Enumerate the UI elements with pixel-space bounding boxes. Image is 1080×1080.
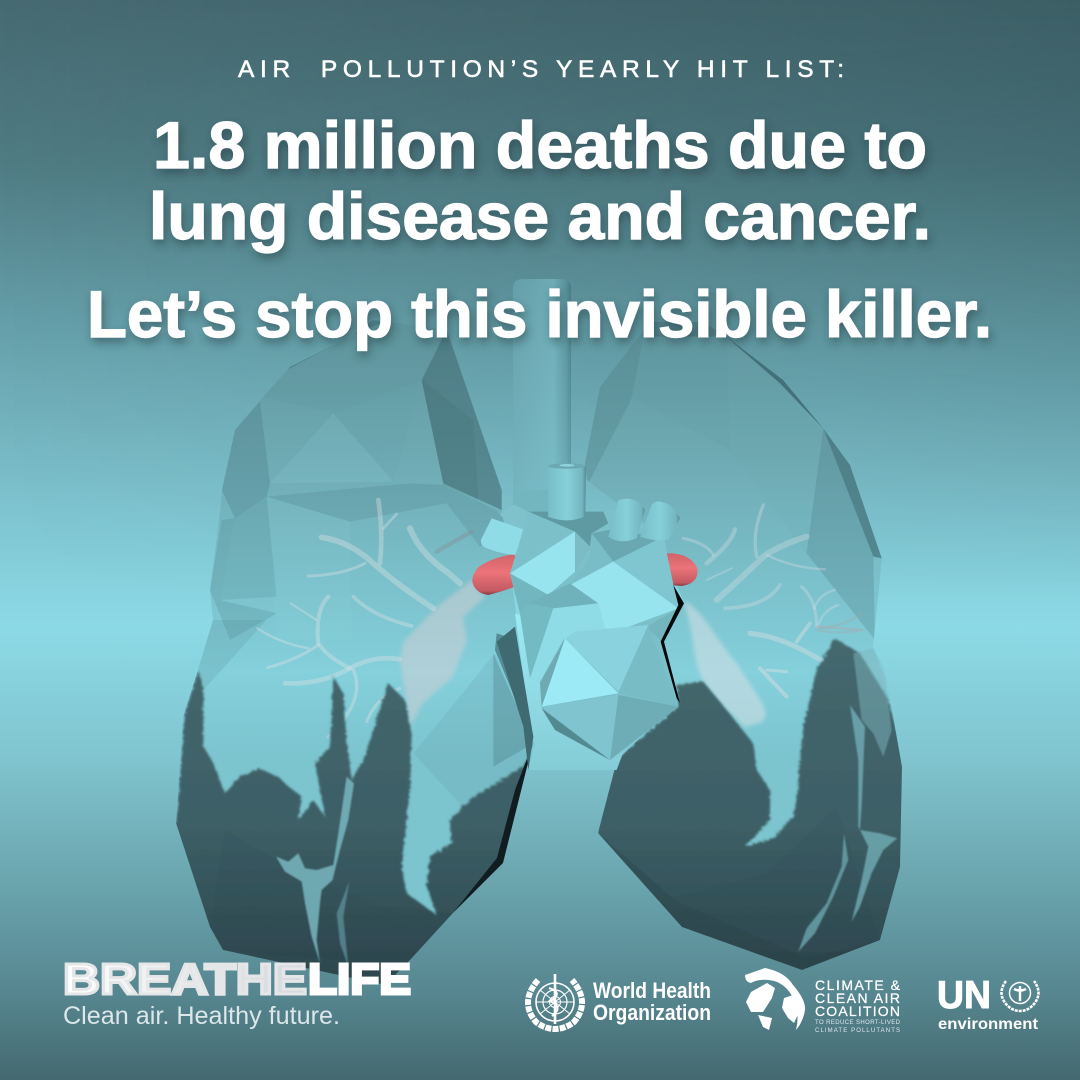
logo: UN environment: UN (937, 974, 991, 1017)
right lung (585, 322, 907, 977)
heart facets (510, 512, 678, 760)
right lung bronchi (683, 505, 862, 632)
logo: UN environment: environment (938, 1016, 1039, 1033)
title: 1.8 million deaths due to (153, 108, 927, 182)
logo: Climate and Clean Air Coalition: COALITION (815, 1003, 900, 1019)
pulmonary vein cylinders (608, 499, 680, 541)
left vessel cylinder (481, 505, 528, 555)
title: lung disease and cancer. (149, 179, 931, 253)
logo: BreatheLife (63, 955, 411, 1030)
logo: Climate and Clean Air Coalition: CLIMATE POLLUTANTS (815, 1028, 900, 1034)
right lung facets (585, 322, 882, 640)
aorta cylinder (548, 463, 586, 520)
left lung (170, 320, 543, 987)
black crack (661, 585, 684, 703)
logo: Climate and Clean Air Coalition: CLIMATE & (815, 977, 901, 993)
right pulmonary artery (667, 553, 698, 586)
icon: WHO emblem (528, 974, 582, 1029)
heading: air pollution's yearly hit list: AIR POLLUTION’S YEARLY HIT LIST: (238, 56, 844, 83)
title (87, 108, 992, 351)
logo: Climate and Clean Air Coalition: CLEAN AIR (815, 990, 900, 1006)
logo: World Health Organization: World Health (593, 978, 711, 1003)
right lung large bronchus (683, 600, 766, 727)
logo: BreatheLife: LIFE (308, 955, 411, 1004)
logo: UN environment (937, 974, 1039, 1033)
left pulmonary artery (472, 554, 515, 595)
trachea base flare (503, 490, 571, 515)
title: Let’s stop this invisible killer. (87, 277, 992, 351)
icon: globe and arc (745, 968, 805, 1030)
logo: World Health Organization: Organization (593, 1000, 711, 1025)
left lung dark smoke (170, 670, 543, 987)
left lung large bronchus (400, 580, 485, 727)
right lung dark smoke (597, 638, 907, 977)
logo: BreatheLife: Clean air. Healthy future. (63, 1002, 340, 1030)
logo: BreatheLife: BREATHE (63, 955, 307, 1004)
shadowed wedge (497, 627, 533, 770)
logo: World Health Organization (528, 974, 711, 1029)
heart (472, 463, 698, 770)
trachea (513, 279, 571, 512)
left lung bronchi (257, 500, 472, 737)
left lung facets (180, 320, 533, 840)
logo: Climate and Clean Air Coalition: TO REDUCE SHORT-LIVED (815, 1020, 901, 1026)
gap between lungs (515, 613, 627, 770)
heart base silhouette (510, 512, 678, 760)
icon: UN environment emblem (1002, 981, 1038, 1011)
logo: Climate and Clean Air Coalition (745, 968, 901, 1034)
